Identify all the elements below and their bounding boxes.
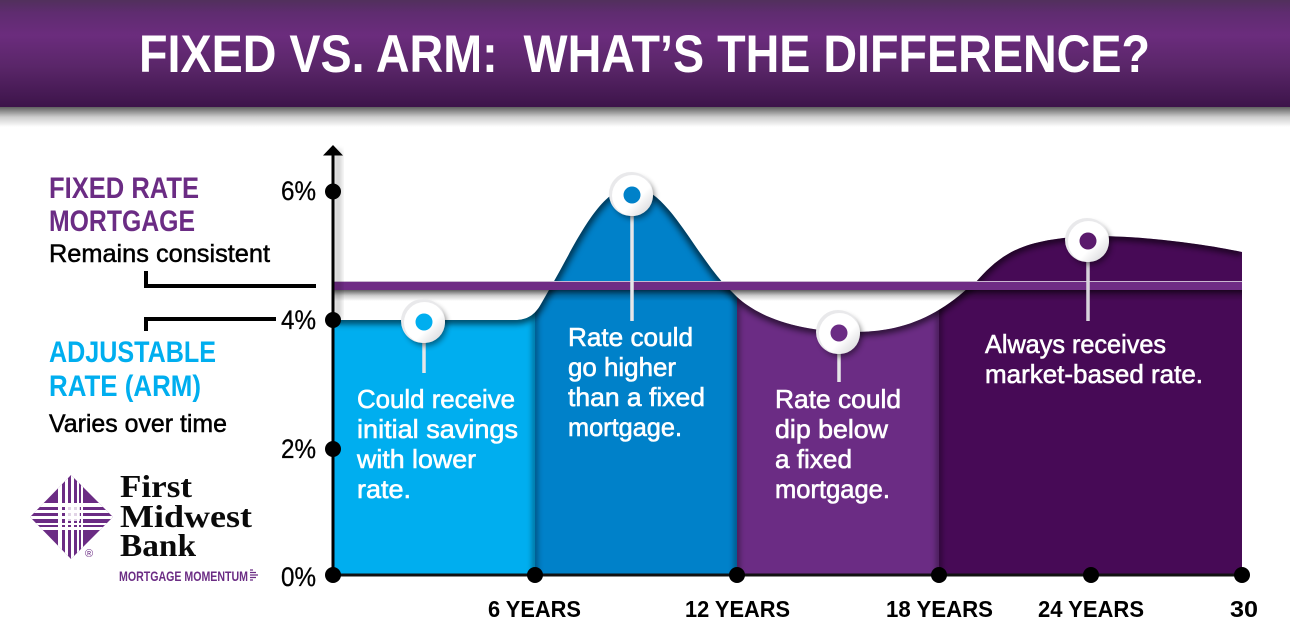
icon: diamond mark: ®: [85, 548, 93, 560]
y axis labels: 6%: [281, 176, 316, 206]
x axis labels: 30: [1230, 596, 1258, 622]
y axis labels: 2%: [281, 434, 316, 464]
callout: rate could go higher: [568, 172, 705, 442]
axes: [323, 145, 1250, 583]
legend: fixed rate mortgage: [49, 172, 316, 286]
icon: momentum arrow: [250, 570, 258, 580]
legend: adjustable rate: ADJUSTABLE: [49, 336, 216, 369]
fixed rate line: [333, 281, 1242, 301]
legend: adjustable rate: RATE (ARM): [49, 370, 201, 403]
callout: initial savings: Could receive: [357, 384, 515, 414]
logo wordmark: Midwest: [120, 498, 252, 534]
callout: always market-based: Always receives: [985, 329, 1166, 359]
title banner: [0, 0, 1290, 127]
chart fills: [334, 194, 1242, 574]
callout: rate could dip below: a fixed: [775, 444, 852, 474]
x axis labels: 6 YEARS: [488, 596, 581, 622]
legend: fixed rate mortgage: Remains consistent: [49, 240, 270, 268]
y axis labels: 0%: [281, 562, 316, 592]
x axis labels: 12 YEARS: [685, 596, 790, 622]
callout: initial savings: rate.: [357, 474, 411, 504]
callout: rate could go higher: than a fixed: [568, 382, 705, 412]
legend: adjustable rate: Varies over time: [49, 410, 227, 438]
logo wordmark: First: [120, 468, 192, 504]
logo wordmark: Bank: [120, 527, 196, 563]
callout: initial savings: with lower: [356, 444, 476, 474]
x axis labels: 24 YEARS: [1038, 596, 1144, 622]
y axis labels: [281, 176, 316, 592]
x axis labels: 18 YEARS: [886, 596, 993, 622]
axis dots: [325, 184, 1250, 583]
callout: rate could go higher: Rate could: [568, 322, 693, 352]
callout: rate could go higher: mortgage.: [568, 412, 682, 442]
legend: adjustable rate: [49, 319, 276, 438]
legend: fixed rate mortgage: MORTGAGE: [49, 205, 195, 238]
callout: initial savings: initial savings: [357, 414, 518, 444]
callout: rate could dip below: [775, 310, 901, 504]
vertical axis: [332, 152, 334, 575]
callout: rate could dip below: dip below: [775, 414, 888, 444]
callout: initial savings: [356, 299, 518, 504]
horizontal axis: [333, 574, 1242, 576]
callout: rate could dip below: Rate could: [775, 384, 901, 414]
callout: always market-based: market-based rate.: [985, 359, 1203, 389]
axis arrow: [323, 145, 343, 156]
logo wordmark: [120, 468, 252, 563]
x axis labels: [488, 596, 1258, 622]
area chart: [334, 194, 1242, 574]
callout: rate could go higher: go higher: [568, 352, 676, 382]
callout: always market-based: [985, 218, 1203, 389]
tagline: MORTGAGE MOMENTUM: [119, 568, 248, 584]
callout: rate could dip below: mortgage.: [775, 474, 890, 504]
y axis labels: 4%: [281, 305, 316, 335]
legend: fixed rate mortgage: FIXED RATE: [49, 172, 199, 205]
title: FIXED VS. ARM: WHAT’S THE DIFFERENCE?: [139, 25, 1150, 84]
icon: diamond mark: [30, 475, 113, 560]
logo: First Midwest Bank: [30, 468, 258, 584]
